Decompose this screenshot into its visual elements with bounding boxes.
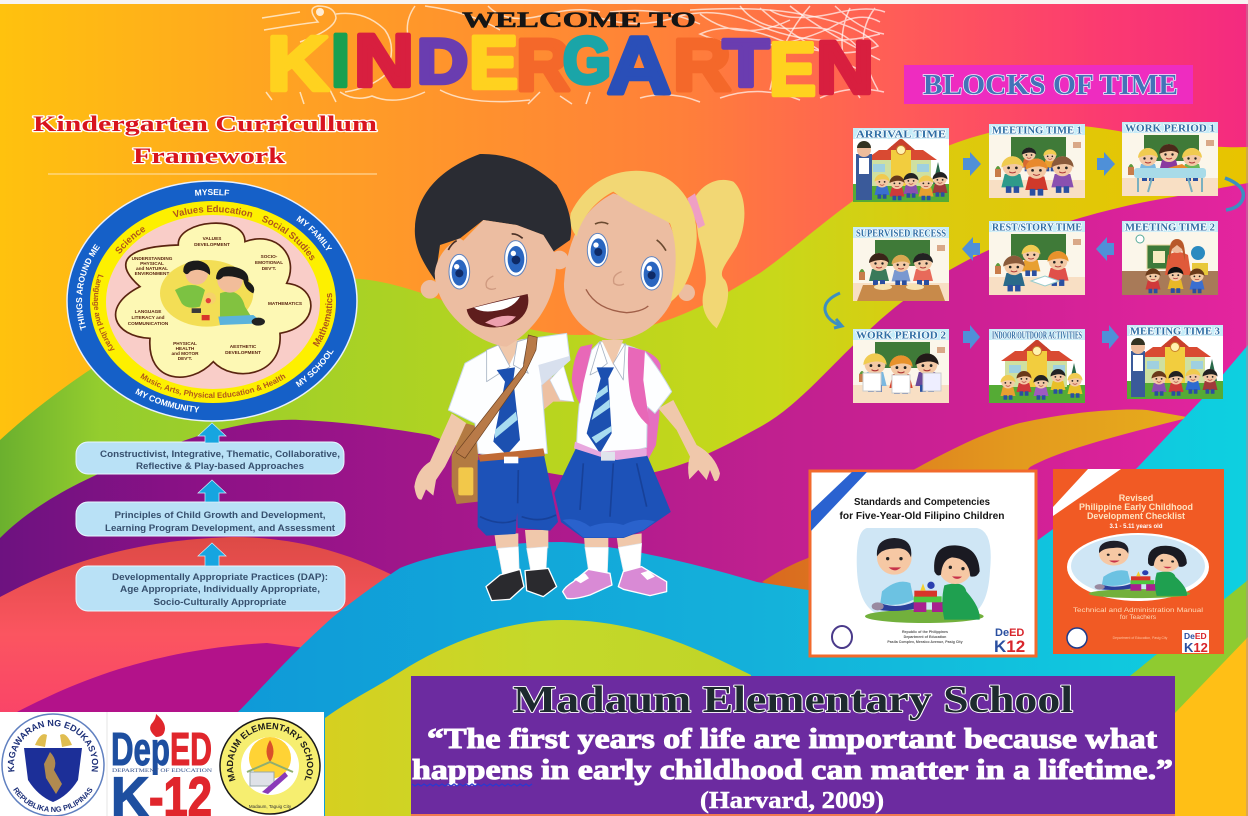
card: supervised recess — [853, 227, 949, 301]
arrow right: arrival to meeting — [963, 152, 981, 176]
domain labels: COMMUNICATION — [128, 321, 169, 326]
ring labels: subjects: Music, Arts, Physical Education & Health — [140, 373, 286, 398]
logo: DepEd K-12: ED — [170, 723, 212, 775]
card: rest story time — [989, 221, 1085, 295]
approach box: DAP: Age Appropriate, Individually Appropriate, — [120, 584, 320, 595]
domain labels: HEALTH — [176, 346, 195, 351]
heading: kindergarten curriculum framework — [33, 111, 377, 168]
domain labels: AESTHETIC — [230, 344, 257, 349]
book illustration: children with blocks — [865, 538, 984, 623]
ring labels: themes: MY SCHOOL — [296, 350, 334, 388]
heading: kindergarten: N — [354, 19, 414, 102]
white chalk scribbles — [262, 6, 885, 104]
logo: department of education seal — [1, 713, 105, 816]
approach box: DAP: Developmentally Appropriate Practices (DAP): — [112, 572, 328, 583]
domain labels: PHYSICAL — [173, 341, 197, 346]
logo strip — [0, 712, 324, 816]
approach box: principles: Learning Program Development, and Assessment — [105, 523, 336, 534]
domain labels: LANGUAGE — [135, 309, 161, 314]
card: rest story time: REST/STORY TIME — [992, 222, 1082, 234]
ring labels: subjects: Social Studies — [262, 216, 314, 260]
two school children illustration — [414, 154, 744, 601]
logo: department of education seal: REPUBLIKA NG PILIPINAS — [13, 787, 92, 812]
boy shirt — [448, 333, 570, 458]
domain labels: DEVELOPMENT — [194, 242, 230, 247]
domain labels: and MOTOR — [172, 351, 199, 356]
ring labels: themes: MYSELF — [194, 189, 230, 196]
arrow right: activities to meeting — [1102, 325, 1119, 349]
book: standards and competencies: Pasila Complex, Meralco Avenue, Pasig City — [887, 640, 963, 644]
background: blue wave — [238, 345, 1248, 816]
book seal — [1067, 628, 1087, 648]
book: development checklist: Technical and Administration Manual — [1073, 607, 1204, 614]
approach box: constructivist — [76, 442, 344, 474]
book: standards and competencies — [810, 471, 1036, 656]
boy tie — [493, 367, 520, 455]
arrow up to box one — [198, 480, 226, 502]
card: meeting time 3: MEETING TIME 3 — [1130, 326, 1220, 338]
domain labels: ENVIRONMENT — [135, 271, 169, 276]
background: yellow wedge — [1175, 637, 1248, 816]
top white margin — [0, 0, 1248, 4]
book: standards and competencies: for Five-Year-Old Filipino Children — [840, 510, 1004, 522]
background: red wave — [0, 537, 420, 816]
book: standards and competencies: Standards and Competencies — [854, 496, 990, 508]
boy legs and socks — [494, 530, 548, 550]
girl backpack — [643, 351, 661, 459]
girl legs and socks — [584, 533, 642, 550]
book: development checklist: Department of Education, Pasig City — [1113, 636, 1168, 640]
ring labels: subjects: Science — [116, 227, 146, 254]
card: work period 2 — [853, 329, 949, 403]
book DepEd K12 logo — [1182, 630, 1209, 653]
book: development checklist: Revised — [1119, 493, 1153, 503]
book: development checklist: 3.1 - 5.11 years old — [1109, 524, 1163, 530]
approach box: DAP — [76, 566, 345, 611]
approach box: principles — [76, 502, 345, 536]
domain labels: and NATURAL — [136, 266, 168, 271]
book: development checklist: Development Checklist — [1087, 511, 1185, 521]
ring labels: themes: THINGS AROUND ME — [76, 244, 100, 331]
card: work period 1: WORK PERIOD 1 — [1125, 124, 1215, 134]
boy shorts — [478, 455, 557, 535]
girl arm — [658, 400, 720, 481]
arrow left: rest to recess — [962, 237, 980, 261]
boy head — [415, 154, 571, 347]
ring labels: subjects: Mathematics — [312, 293, 332, 347]
background: gold band — [762, 410, 1187, 600]
logo: Madaum Elementary School seal: MADAUM ELEMENTARY SCHOOL — [226, 722, 314, 782]
boy arm — [414, 413, 467, 500]
book: development checklist — [1053, 469, 1224, 655]
book: development checklist: for Teachers — [1120, 614, 1157, 621]
spell-check squiggle — [412, 784, 532, 786]
heading: kindergarten: K — [267, 21, 329, 107]
domain labels — [128, 236, 302, 361]
ring labels: themes — [76, 189, 334, 412]
book: standards and competencies: Department of Education — [904, 635, 946, 639]
heading: kindergarten curriculum framework: Framework — [133, 143, 286, 168]
heading: kindergarten: D — [417, 27, 468, 97]
heading: kindergarten: A — [607, 21, 671, 111]
heading: welcome to: WELCOME TO — [462, 7, 696, 32]
heading: kindergarten: R — [516, 25, 570, 106]
ring labels: subjects: Values Education — [172, 205, 252, 218]
ring labels: themes: MY COMMUNITY — [135, 388, 200, 412]
ring labels: themes: MY FAMILY — [296, 216, 332, 250]
heading: kindergarten curriculum framework: Kindergarten Curricullum — [33, 111, 377, 136]
girl head — [564, 171, 744, 340]
girl straps — [572, 344, 593, 404]
card: indoor outdoor activities: INDOOR/OUTDOOR ACTIVITIES — [992, 330, 1082, 342]
ring labels: subjects — [92, 205, 332, 398]
title banner — [262, 6, 885, 111]
domain labels: EMOTIONAL — [255, 260, 283, 265]
children bodies — [414, 333, 720, 601]
domain labels: PHYSICAL — [140, 261, 164, 266]
heading: kindergarten: T — [723, 26, 769, 101]
banner: blocks of time: BLOCKS OF TIME — [923, 69, 1178, 101]
background: green wedge — [1130, 580, 1248, 816]
heading: kindergarten: I — [331, 19, 350, 102]
book seal — [832, 626, 852, 648]
domain labels: VALUES — [203, 236, 221, 241]
boy bag strap — [456, 335, 537, 458]
girl tie — [587, 367, 614, 453]
heading: kindergarten: E — [469, 21, 518, 104]
girl shirt — [577, 342, 672, 458]
card: meeting time 1 — [989, 124, 1085, 198]
book: development checklist: DeED — [1184, 631, 1207, 641]
approach box: principles: Principles of Child Growth and Development, — [114, 510, 326, 521]
ring labels: subjects: Language and Library — [92, 274, 115, 351]
background: lower left purple wave — [0, 643, 320, 816]
girl sleeve over boy arm — [550, 365, 574, 402]
domain labels: DEVELOPMENT — [225, 350, 261, 355]
logo: department of education seal: KAGAWARAN NG EDUKASYON — [8, 720, 98, 772]
domain labels: LITERACY and — [132, 315, 165, 320]
book illustration frame — [1067, 533, 1209, 601]
book: development checklist: K12 — [1184, 640, 1208, 655]
book: development checklist: Philippine Early Childhood — [1079, 502, 1193, 512]
girl neck and collar — [602, 340, 623, 365]
boy neck and collar — [497, 339, 522, 367]
girl belt — [574, 442, 647, 460]
domain labels: SOCIO- — [261, 254, 278, 259]
heading: kindergarten: G — [563, 23, 611, 97]
logo: DepEd K-12: Dep — [111, 723, 170, 775]
card: supervised recess: SUPERVISED RECESS — [856, 228, 946, 240]
curved arrow: row two to row three — [825, 293, 842, 328]
domain labels: DEV'T. — [262, 266, 276, 271]
girl skirt — [555, 448, 670, 537]
background: magenta wave — [0, 183, 1248, 816]
quote line two: happens in early childhood can matter in a lifetime.” — [412, 755, 1173, 786]
card: arrival time: ARRIVAL TIME — [856, 130, 946, 140]
boy shoes — [486, 569, 524, 601]
book: standards and competencies: Republic of the Philippines — [902, 630, 948, 634]
curved arrow: row one to row two — [1225, 178, 1243, 210]
children at play illustration — [160, 260, 265, 327]
logo: DepEd K-12 — [111, 714, 212, 816]
boy belt — [478, 448, 545, 462]
girl shoes — [563, 569, 612, 599]
card: arrival time — [853, 128, 949, 202]
curriculum framework circle — [66, 180, 358, 422]
arrow up to circle — [198, 423, 226, 443]
approach box: constructivist: Constructivist, Integrative, Thematic, Collaborative, — [100, 449, 340, 460]
approach box: DAP: Socio-Culturally Appropriate — [154, 597, 286, 608]
card: meeting time 3 — [1127, 325, 1223, 399]
card: indoor outdoor activities — [989, 329, 1085, 403]
background: lime hump — [325, 620, 751, 816]
card: meeting time 2: MEETING TIME 2 — [1125, 222, 1215, 234]
book DepEd K12 logo: DeED — [995, 627, 1024, 639]
domain labels: UNDERSTANDING — [132, 256, 173, 261]
card: work period 1 — [1122, 122, 1218, 196]
boy bag — [452, 423, 478, 504]
flower of developmental domains — [116, 223, 311, 377]
boy arm around girl — [542, 377, 573, 410]
logo: DepEd K-12: DEPARTMENT OF EDUCATION — [112, 768, 212, 774]
arrow left: meeting to rest — [1096, 237, 1114, 261]
domain labels: DEV'T. — [178, 356, 192, 361]
citation: (Harvard, 2009) — [700, 788, 884, 814]
card: work period 2: WORK PERIOD 2 — [856, 330, 946, 342]
arrow right: meeting to work — [1097, 152, 1115, 176]
book sky blob — [857, 528, 991, 615]
arrow right: work to activities — [963, 325, 980, 349]
heading: kindergarten — [267, 19, 874, 111]
logo: Madaum Elementary School seal: Madaum, Taguig City — [249, 804, 292, 809]
card: meeting time 1: MEETING TIME 1 — [992, 126, 1082, 136]
heading: kindergarten: N — [816, 26, 874, 109]
school name and quote panel — [411, 676, 1175, 816]
heading: kindergarten: R — [673, 25, 731, 106]
school name: Madaum Elementary School — [513, 679, 1073, 721]
arrow up to box two — [198, 543, 226, 566]
book: standards and competencies: K12 — [994, 637, 1025, 656]
right margin line — [1246, 4, 1248, 816]
card: meeting time 2 — [1122, 221, 1218, 295]
approach box: constructivist: Reflective & Play-based Approaches — [136, 461, 304, 472]
logo: Madaum Elementary School seal — [219, 717, 321, 815]
quote line one: “The first years of life are important because what — [427, 724, 1158, 755]
domain labels: MATHEMATICS — [268, 301, 302, 306]
heading: kindergarten: E — [769, 27, 816, 111]
